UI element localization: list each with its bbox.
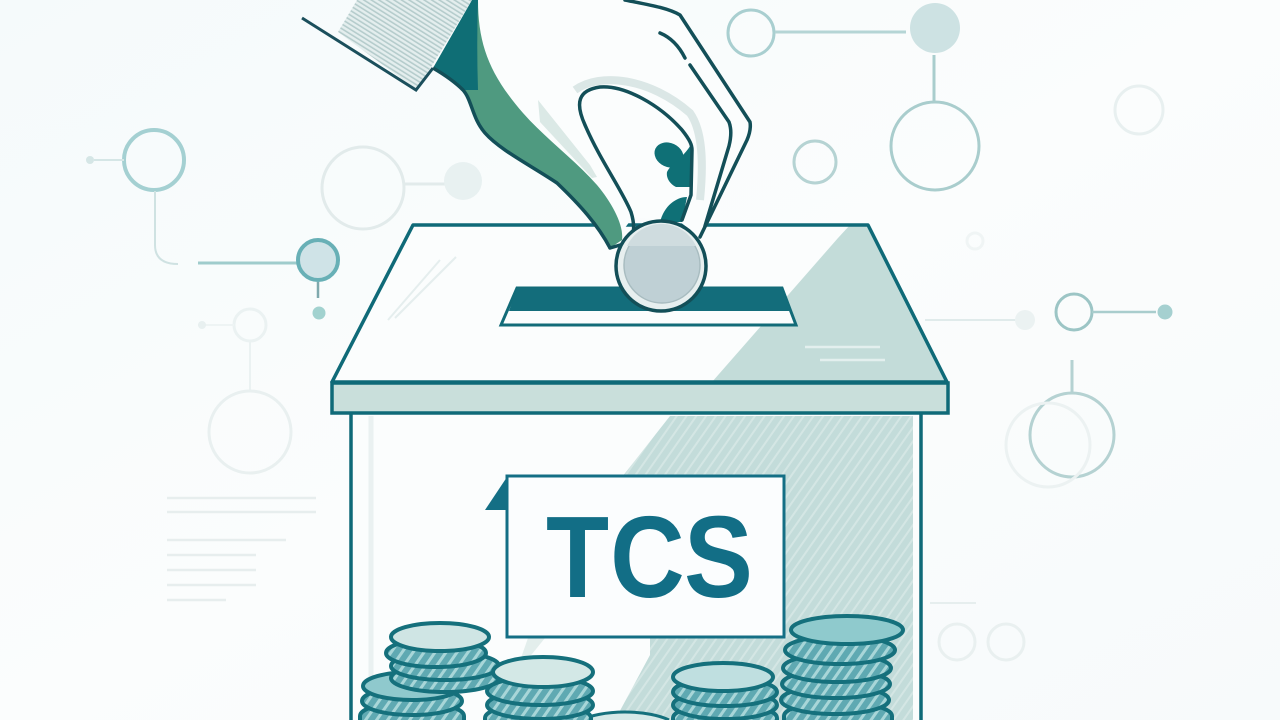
background network: right nodes [925,294,1172,660]
ballot box [332,225,948,720]
label: TCS [485,476,784,637]
coin stack 2 [485,657,593,720]
box body [351,413,921,720]
coin stack 1 [360,623,499,720]
coin stack 3 [673,663,777,720]
background network: top right nodes [728,3,1163,249]
background network: left nodes [86,130,482,473]
finger shadow [575,80,702,200]
falling coin [616,221,706,311]
decorative text lines [167,498,316,600]
shirt sleeve [433,0,622,248]
hand outline [580,0,750,248]
coin slot [501,288,796,325]
hand dropping coin [302,0,750,311]
box lid [332,225,948,413]
sleeve cuff [302,0,472,90]
coin stack 4 [781,616,903,720]
coin stacks [360,616,903,720]
hand white fill [478,0,750,248]
curled fingertips [650,138,692,222]
bottom centre coin [581,712,669,720]
label: TCS: TCS [546,493,753,622]
